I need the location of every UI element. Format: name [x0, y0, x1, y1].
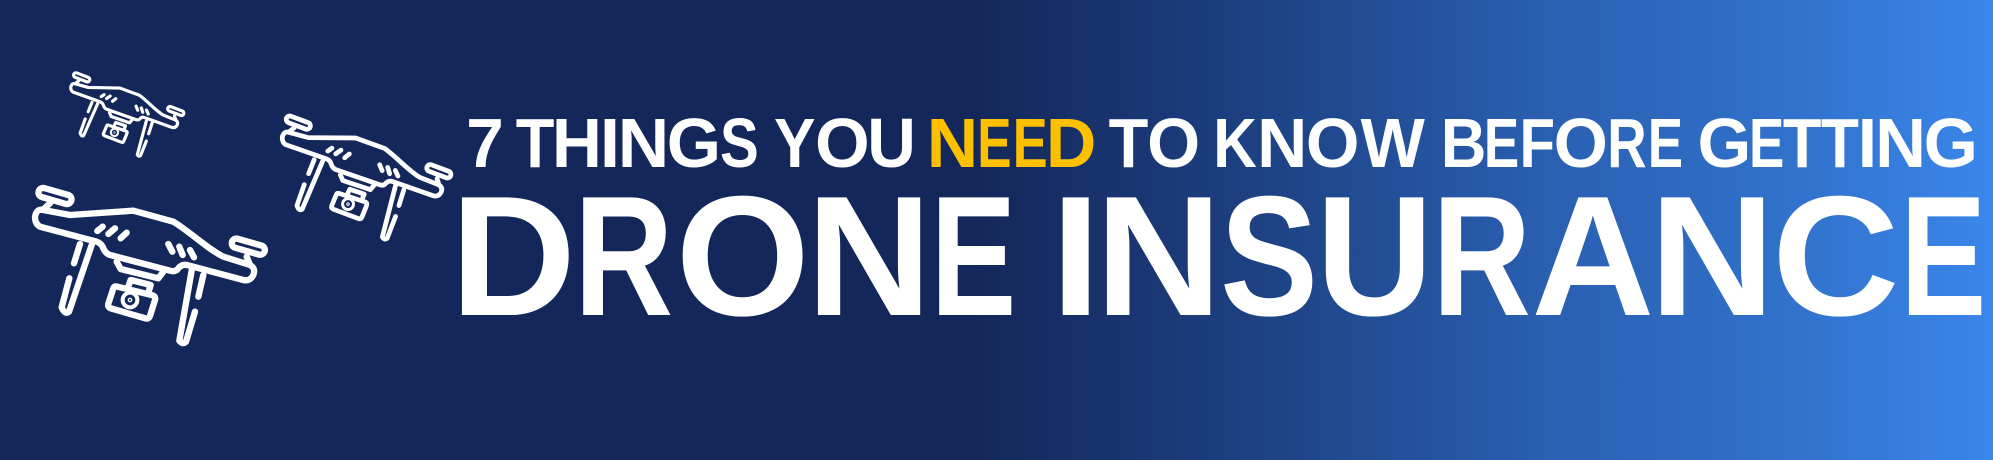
- heading: first line: H: [552, 104, 602, 182]
- heading: first line: E: [1484, 104, 1519, 182]
- heading: first line: T: [1109, 104, 1148, 182]
- heading: first line: T: [1783, 104, 1821, 182]
- heading: first line: T: [516, 104, 554, 182]
- heading: first line: G: [1924, 104, 1978, 182]
- heading: first line: I: [1858, 104, 1877, 182]
- heading: first line: O: [815, 104, 870, 182]
- heading: first line: D: [1046, 104, 1096, 182]
- heading: drone insurance: E: [931, 161, 1016, 352]
- icon: medium drone: [275, 115, 455, 244]
- heading: first line: G: [667, 104, 721, 182]
- heading: drone insurance: D: [450, 161, 576, 352]
- heading: first line: W: [1361, 104, 1425, 182]
- icon: large drone: [35, 187, 266, 343]
- heading: drone insurance: C: [1772, 161, 1900, 352]
- icon: small drone: [65, 72, 187, 160]
- heading: first line: R: [1607, 104, 1647, 182]
- heading: first line: I: [600, 104, 620, 182]
- heading: first line: E: [1648, 104, 1683, 182]
- heading: first line: N: [1875, 104, 1926, 182]
- heading: first line: N: [927, 104, 978, 182]
- heading: first line: E: [977, 104, 1012, 182]
- heading: drone insurance: N: [1650, 161, 1775, 352]
- heading: first line: G: [1698, 104, 1751, 182]
- heading: drone insurance: O: [676, 161, 810, 352]
- heading: first line: E: [1013, 104, 1048, 182]
- heading: first line: 7: [466, 104, 504, 182]
- heading: first line: O: [1554, 104, 1608, 182]
- heading: first line: O: [1306, 104, 1360, 182]
- heading: drone insurance: N: [806, 161, 932, 352]
- heading: drone insurance: R: [1432, 161, 1531, 352]
- heading: first line: E: [1749, 104, 1784, 182]
- heading: first line: F: [1520, 104, 1555, 182]
- heading: drone insurance: A: [1531, 161, 1654, 352]
- heading: drone insurance: R: [574, 161, 673, 352]
- heading: first line: K: [1213, 104, 1257, 182]
- heading: first line: S: [720, 104, 759, 182]
- heading: first line: U: [867, 104, 916, 182]
- heading: first line: N: [1257, 104, 1307, 182]
- heading: first line: Y: [774, 104, 816, 182]
- heading: first line: B: [1441, 104, 1486, 182]
- heading: first line: O: [1147, 104, 1200, 182]
- heading: first line: T: [1821, 104, 1859, 182]
- heading: first line: N: [618, 104, 669, 182]
- heading: drone insurance: U: [1316, 161, 1433, 352]
- heading: drone insurance: N: [1095, 161, 1222, 352]
- heading: drone insurance: S: [1220, 161, 1318, 352]
- heading: drone insurance: I: [1051, 161, 1101, 352]
